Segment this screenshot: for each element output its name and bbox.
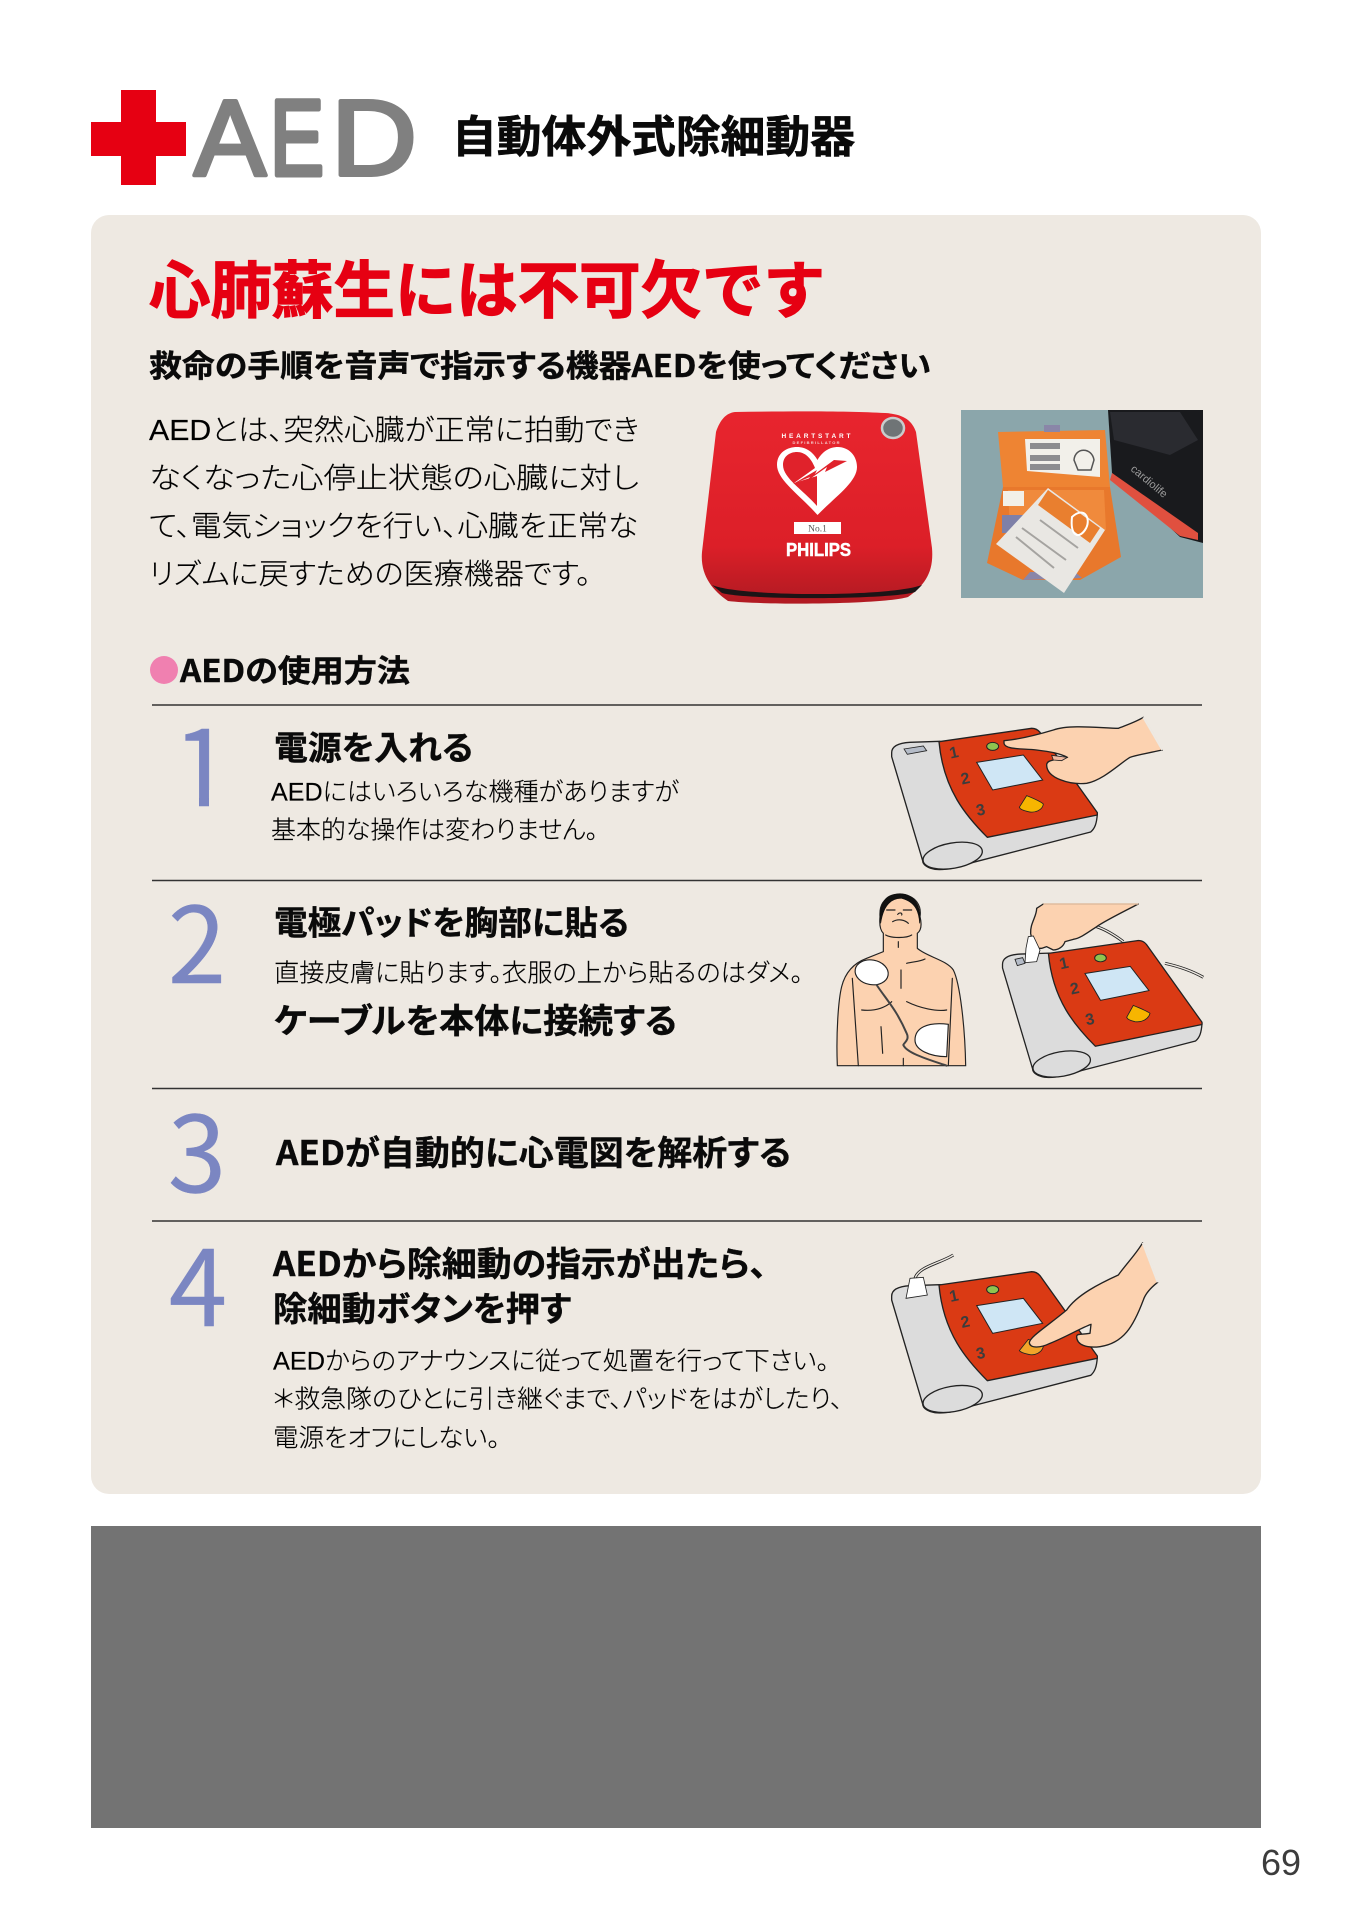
text block: AED description: AEDとは、突然心臓が正常に拍動でき	[149, 414, 639, 447]
subheading: 救命の手順を音声で指示する機器AEDを使ってください	[149, 341, 931, 386]
step 4 text: ＊救急隊のひとに引き継ぐまで、パッドをはがしたり、	[273, 1386, 843, 1414]
illustration: pressing shock button: 3	[975, 1345, 987, 1363]
logo: AED: E	[270, 77, 324, 198]
photo: red Philips AED: HEARTSTART	[782, 433, 851, 440]
text block: AED description	[149, 414, 639, 591]
photo: orange AED on carpet: cardiolife	[1128, 463, 1170, 501]
illustration: connecting cable to AED	[1003, 904, 1203, 1081]
step 3 heading: AEDが自動的に心電図を解析する	[275, 1126, 791, 1175]
panel: AED explanation	[91, 215, 1261, 1494]
text block: AED description: なくなった心停止状態の心臓に対し	[149, 462, 639, 495]
illustration: connecting cable to AED: 1	[1058, 955, 1070, 973]
step 1 number: 1	[173, 685, 231, 837]
page number: 69	[1261, 1842, 1301, 1883]
step 4 heading	[272, 1237, 767, 1331]
step 4 text	[273, 1348, 843, 1452]
step 4 heading: AEDから除細動の指示が出たら、	[272, 1237, 767, 1286]
icon: red cross	[91, 90, 186, 185]
illustration: power on AED	[892, 717, 1162, 873]
step 2 heading: 電極パッドを胸部に貼る	[274, 896, 629, 944]
illustration: pressing shock button	[892, 1243, 1158, 1417]
gray panel	[91, 1526, 1261, 1828]
photo: orange AED on carpet	[961, 410, 1203, 598]
step 4 text: 電源をオフにしない。	[273, 1424, 500, 1452]
illustration: power on AED: 1	[948, 744, 960, 763]
step 2 cable heading: ケーブルを本体に接続する	[274, 994, 677, 1043]
photo: red Philips AED	[702, 411, 932, 604]
step 1 heading: 電源を入れる	[274, 722, 473, 770]
illustration: power on AED: 3	[975, 801, 987, 820]
logo: AED	[194, 77, 417, 198]
photo: red Philips AED: PHILIPS	[786, 540, 851, 560]
illustration: power on AED: 2	[959, 770, 972, 789]
step 1 text	[271, 778, 679, 844]
illustration: pressing shock button: 1	[948, 1287, 960, 1306]
photo: red Philips AED: No.1	[808, 524, 827, 534]
text block: AED description: て、電気ショックを行い、心臓を正常な	[149, 510, 638, 543]
step 1 text: AEDにはいろいろな機種がありますが	[271, 778, 679, 806]
logo: AED: A	[194, 77, 266, 198]
heading: how to use: AEDの使用方法	[179, 646, 410, 691]
heading: red headline: 心肺蘇生には不可欠です	[149, 240, 825, 330]
step 4 number: 4	[169, 1205, 227, 1357]
photo: red Philips AED: DEFIBRILLATOR	[792, 440, 840, 445]
step 3 number: 3	[168, 1071, 226, 1223]
step 2 number: 2	[168, 862, 226, 1014]
illustration: pressing shock button: 2	[959, 1313, 972, 1332]
step 4 heading: 除細動ボタンを押す	[273, 1282, 571, 1331]
step 1 text: 基本的な操作は変わりません。	[271, 816, 598, 844]
step 2 text: 直接皮膚に貼ります。衣服の上から貼るのはダメ。	[274, 960, 803, 988]
step 4 text: AEDからのアナウンスに従って処置を行って下さい。	[273, 1348, 829, 1376]
illustration: connecting cable to AED: 2	[1069, 980, 1081, 999]
text block: AED description: リズムに戻すための医療機器です。	[149, 558, 591, 591]
logo: AED: D	[331, 77, 417, 198]
illustration: connecting cable to AED: 3	[1084, 1011, 1096, 1029]
title: 自動体外式除細動器	[452, 101, 855, 165]
illustration: man with pads	[837, 894, 966, 1066]
